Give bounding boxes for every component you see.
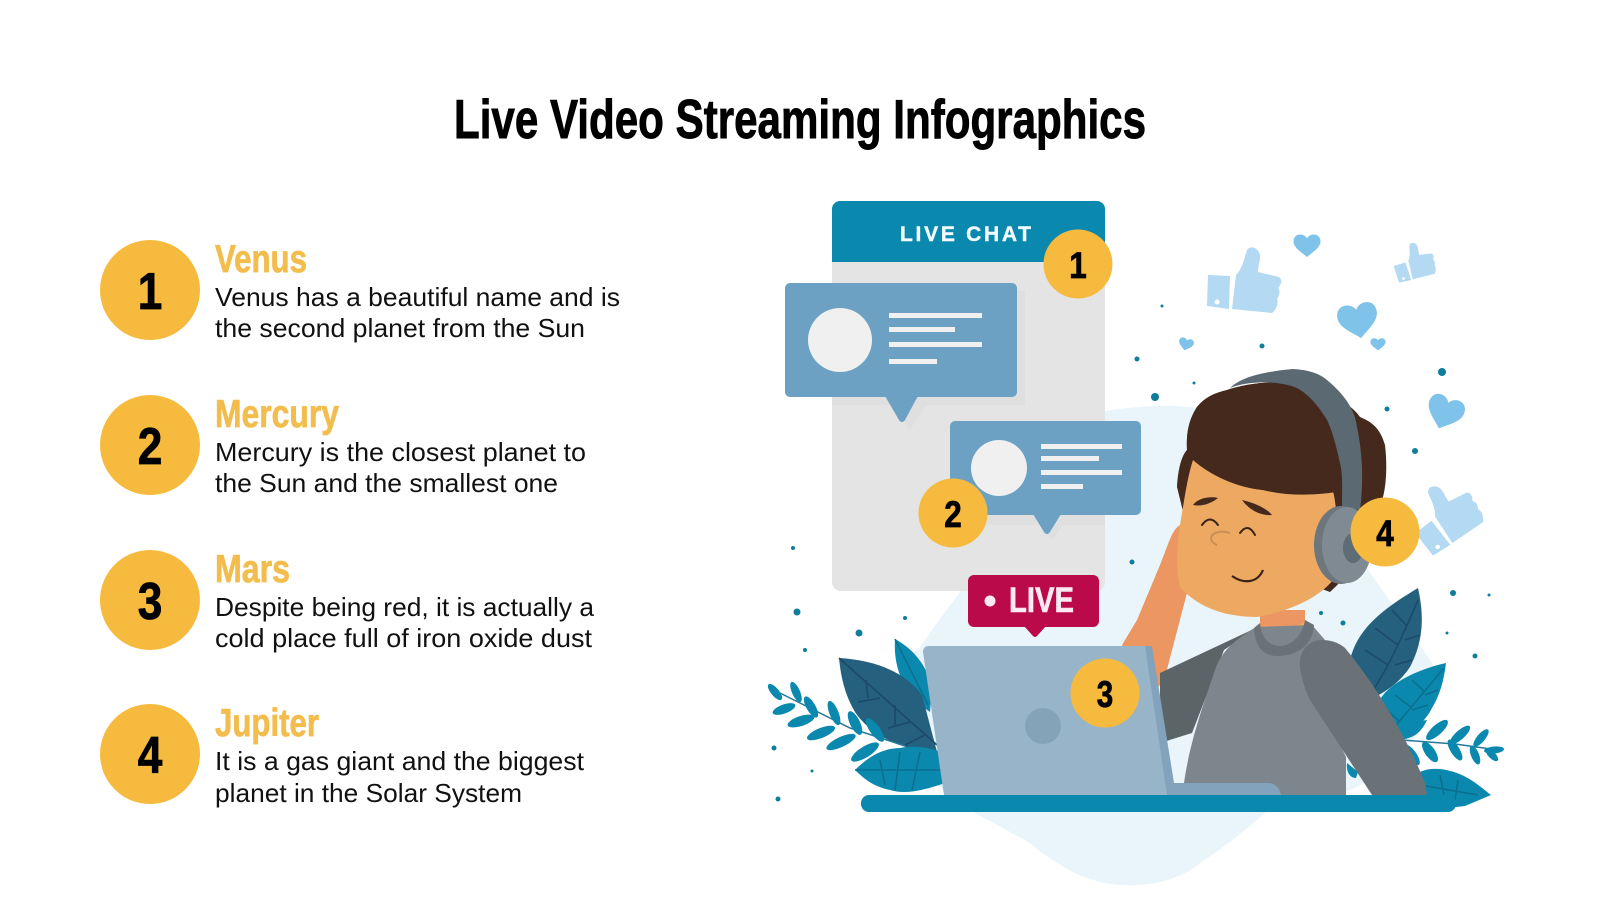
eyes [1202, 520, 1255, 535]
list item 2: Mercury: the Sun and the smallest one [215, 468, 558, 498]
list item 1: Venus: the second planet from the Sun [215, 313, 585, 343]
illustration: background blob [891, 406, 1435, 885]
left sleeve [1160, 627, 1258, 743]
list item 3: Mars: cold place full of iron oxide dust [215, 623, 593, 653]
list item 4: Jupiter: Jupiter [215, 702, 319, 745]
badge 2: 2 [944, 495, 962, 536]
badge 3: 3 [1097, 675, 1113, 716]
badge 4 [1350, 498, 1420, 566]
LIVE tag: LIVE [1009, 581, 1074, 620]
badge 4: 4 [1376, 514, 1394, 555]
list item 3: Mars: Mars [215, 548, 290, 591]
sprig left [766, 680, 905, 765]
list item 3: Mars [100, 548, 595, 653]
face [1177, 460, 1337, 617]
chat bubble 2 [950, 421, 1141, 541]
collar [1254, 620, 1314, 656]
headphone cup [1314, 506, 1368, 584]
icon: thumbs up right [1398, 470, 1489, 561]
right sleeve [1300, 640, 1427, 795]
list item 1: Venus [100, 238, 620, 343]
neck [1260, 610, 1305, 647]
panel: live chat window [832, 201, 1105, 591]
headphone band [1230, 369, 1362, 510]
table [861, 795, 1456, 812]
icon: hearts [1177, 234, 1468, 435]
sprig right [1401, 717, 1504, 767]
laptop [923, 646, 1281, 795]
badge 2 [918, 478, 988, 548]
list item 1: Venus: Venus [215, 238, 307, 281]
list item 2: Mercury [100, 393, 586, 498]
panel: live chat window: LIVE CHAT [900, 223, 1031, 246]
shirt torso [1184, 625, 1346, 795]
character: streamer [1122, 369, 1427, 795]
badge 1: 1 [1069, 246, 1087, 287]
chat bubble 1 [785, 283, 1025, 430]
arm raised to head [1122, 525, 1187, 700]
mouth [1232, 570, 1263, 581]
list item 4: Jupiter: planet in the Solar System [215, 778, 522, 808]
list item 1: Venus: 1 [138, 263, 162, 321]
list item 2: Mercury: 2 [138, 418, 162, 476]
LIVE tag [968, 575, 1099, 637]
list item 4: Jupiter: It is a gas giant and the biggest [215, 746, 585, 776]
nose [1211, 532, 1230, 545]
list item 4: Jupiter [100, 702, 585, 808]
list item 2: Mercury: Mercury is the closest planet to [215, 437, 586, 467]
leaves right [1347, 588, 1491, 810]
icon: thumbs up small [1388, 237, 1439, 286]
leaves left [839, 639, 945, 792]
decorative teal dots [772, 304, 1490, 802]
title: Live Video Streaming Infographics [454, 88, 1146, 150]
list item 3: Mars: Despite being red, it is actually a [215, 592, 595, 622]
hair back [1177, 382, 1386, 592]
icon: thumbs up large [1207, 247, 1281, 313]
hair fringe [1187, 382, 1342, 495]
list item 4: Jupiter: 4 [138, 727, 162, 785]
badge 3 [1070, 658, 1140, 728]
eyebrows [1193, 497, 1218, 506]
list item 2: Mercury: Mercury [215, 393, 339, 436]
list item 1: Venus: Venus has a beautiful name and is [215, 282, 620, 312]
badge 1 [1044, 230, 1112, 298]
list item 3: Mars: 3 [138, 573, 162, 631]
